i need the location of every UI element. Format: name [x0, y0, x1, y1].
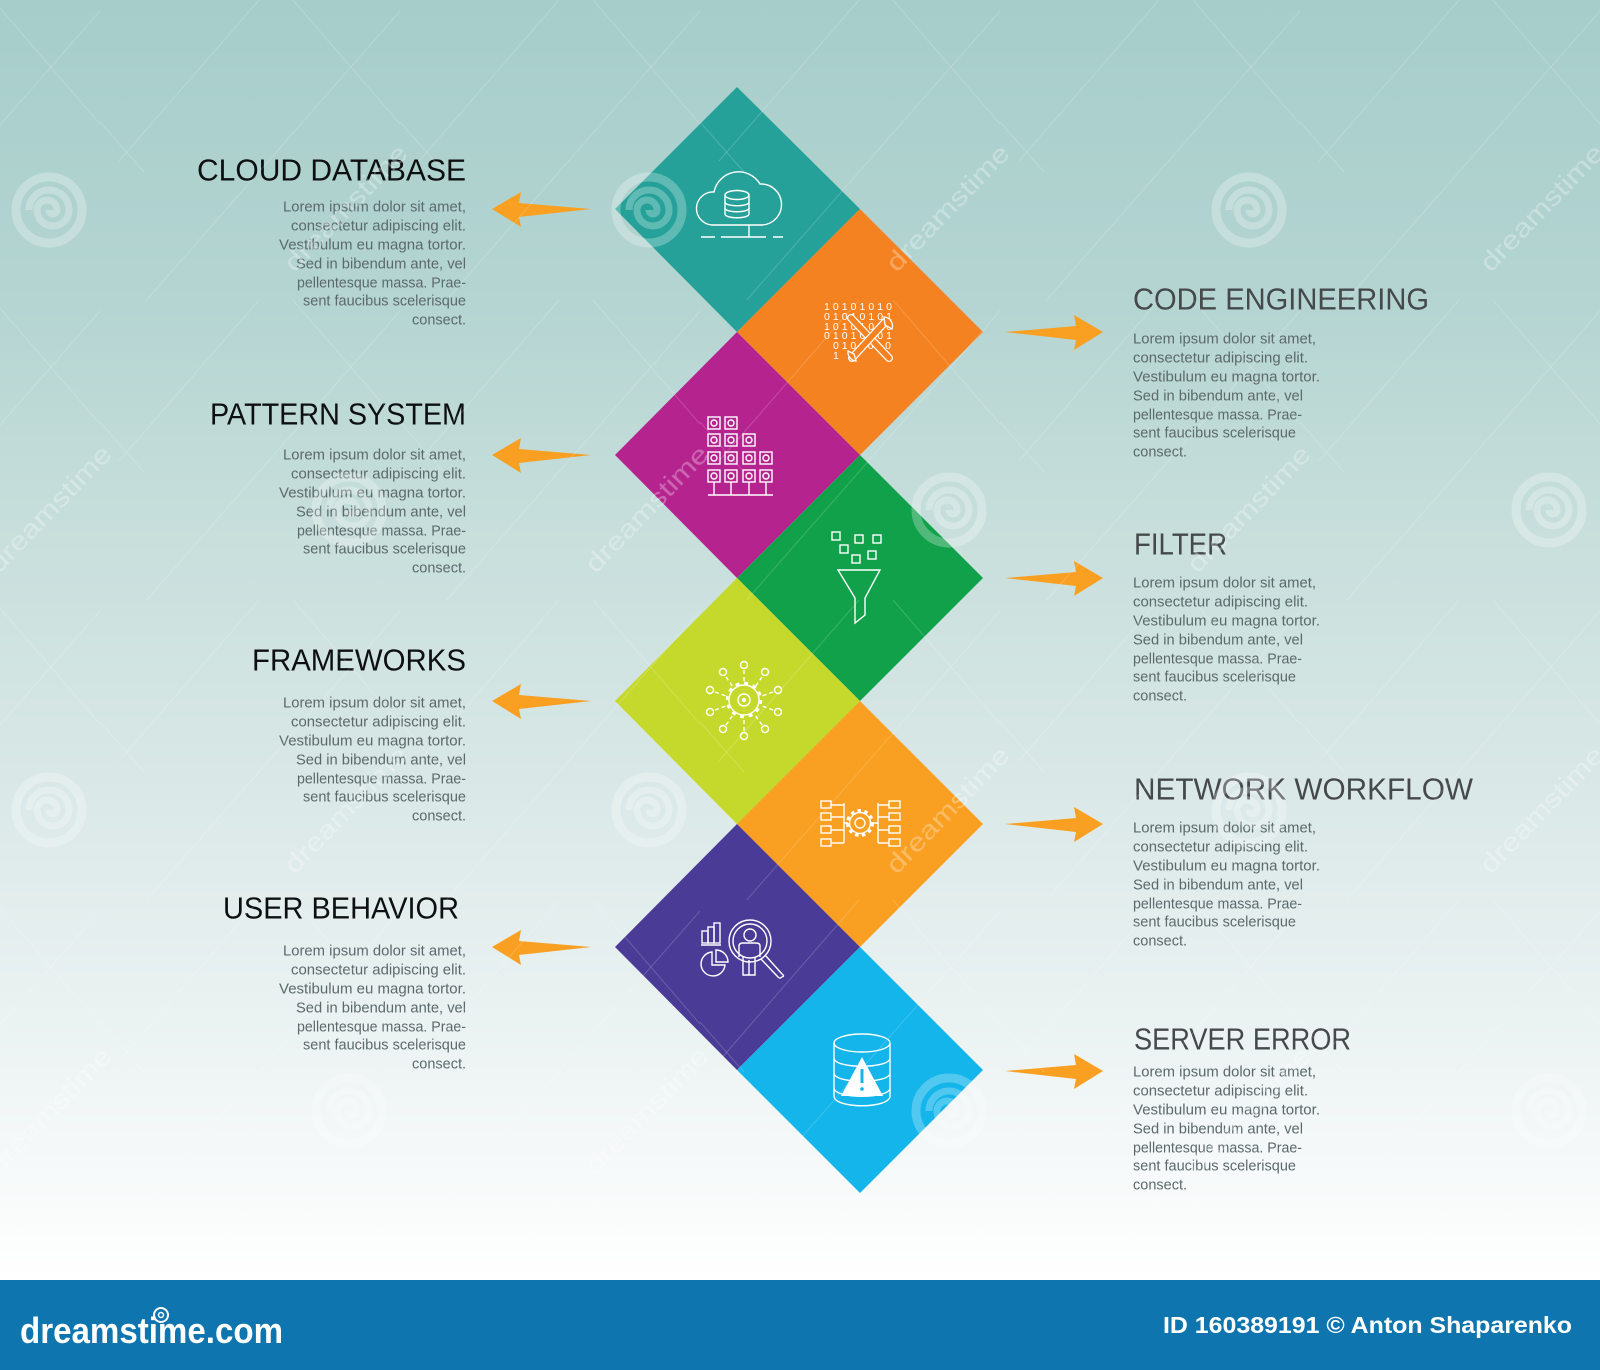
body: cloud database: consectetur adipiscing elit.: [291, 218, 466, 234]
body: pattern system: Lorem ipsum dolor sit amet,: [283, 448, 466, 464]
body: code engineering: consect.: [1133, 444, 1187, 460]
body: code engineering: Sed in bibendum ante, vel: [1133, 388, 1303, 404]
body: network workflow: consectetur adipiscing elit.: [1133, 840, 1308, 856]
arrow: server error: [1005, 1054, 1103, 1089]
body: cloud database: Lorem ipsum dolor sit amet,: [283, 200, 466, 216]
icon: server error: [834, 1034, 890, 1106]
icon: user behavior analytics: [701, 920, 784, 978]
icon: pattern grid: [708, 417, 773, 495]
watermark overlay: dreamstime: [578, 1041, 715, 1180]
heading: server error: SERVER ERROR: [1134, 1022, 1351, 1056]
icon: code and tools: 01010101: [824, 330, 892, 342]
body: user behavior: Vestibulum eu magna tortor.: [279, 982, 466, 998]
arrow: user behavior: [492, 930, 591, 965]
body: filter: [1133, 576, 1320, 704]
body: pattern system: Sed in bibendum ante, vel: [296, 504, 466, 520]
heading: pattern system: PATTERN SYSTEM: [210, 396, 466, 432]
icon: cloud database: [696, 172, 783, 237]
body: network workflow: sent faucibus scelerisque: [1133, 914, 1296, 930]
arrow: code engineering: [1005, 315, 1103, 350]
body: user behavior: consectetur adipiscing elit.: [291, 962, 466, 978]
arrow: filter: [1005, 561, 1103, 596]
body: user behavior: sent faucibus scelerisque: [303, 1038, 466, 1054]
body: user behavior: pellentesque massa. Prae-: [297, 1020, 466, 1036]
body: server error: pellentesque massa. Prae-: [1133, 1140, 1302, 1156]
body: pattern system: consect.: [412, 560, 466, 576]
text block: server error: [1133, 1022, 1351, 1194]
icon: code and tools: 10101010: [824, 321, 892, 333]
body: server error: consectetur adipiscing elit.: [1133, 1084, 1308, 1100]
text block: pattern system: [210, 396, 466, 576]
body: filter: Vestibulum eu magna tortor.: [1133, 614, 1320, 630]
footer bar: [0, 1280, 1600, 1370]
body: server error: [1133, 1064, 1320, 1194]
icon: framework gear network: [706, 662, 782, 740]
body: server error: Vestibulum eu magna tortor.: [1133, 1102, 1320, 1118]
text block: user behavior: [223, 890, 466, 1072]
arrow: pattern system: [492, 438, 591, 473]
diamond: server error: [737, 947, 983, 1193]
body: server error: consect.: [1133, 1178, 1187, 1194]
body: frameworks: Sed in bibendum ante, vel: [296, 752, 466, 768]
footer logo: dreamstime.com: [20, 1310, 283, 1351]
body: cloud database: sent faucibus scelerisque: [303, 294, 466, 310]
body: frameworks: pellentesque massa. Prae-: [297, 772, 466, 788]
icon: code and tools: 0101010: [833, 340, 891, 352]
arrow: cloud database: [492, 192, 591, 227]
body: code engineering: [1133, 332, 1320, 460]
body: user behavior: consect.: [412, 1056, 466, 1072]
watermark overlay: dreamstime: [277, 740, 414, 879]
watermark overlay: dreamstime: [1473, 138, 1600, 277]
body: frameworks: sent faucibus scelerisque: [303, 790, 466, 806]
body: frameworks: Vestibulum eu magna tortor.: [279, 734, 466, 750]
diamond: network workflow: [737, 701, 983, 947]
body: filter: sent faucibus scelerisque: [1133, 670, 1296, 686]
body: network workflow: [1133, 820, 1320, 950]
body: network workflow: Sed in bibendum ante, vel: [1133, 878, 1303, 894]
heading: filter: FILTER: [1134, 526, 1227, 562]
watermark overlay: dreamstime: [1473, 740, 1600, 879]
body: server error: Lorem ipsum dolor sit amet,: [1133, 1064, 1316, 1080]
body: pattern system: pellentesque massa. Prae-: [297, 524, 466, 540]
body: cloud database: consect.: [412, 312, 466, 328]
watermark overlay: dreamstime: [1180, 439, 1317, 578]
diamond stack: [615, 87, 983, 1193]
body: filter: consect.: [1133, 688, 1187, 704]
body: server error: sent faucibus scelerisque: [1133, 1158, 1296, 1174]
body: filter: Sed in bibendum ante, vel: [1133, 632, 1303, 648]
body: code engineering: Vestibulum eu magna tortor.: [1133, 370, 1320, 386]
body: frameworks: consect.: [412, 808, 466, 824]
body: pattern system: [279, 448, 466, 576]
body: pattern system: Vestibulum eu magna tortor.: [279, 486, 466, 502]
body: frameworks: [279, 696, 466, 824]
body: server error: Sed in bibendum ante, vel: [1133, 1122, 1303, 1138]
icon: code and tools: 10101010: [824, 301, 892, 313]
body: pattern system: consectetur adipiscing elit.: [291, 466, 466, 482]
body: user behavior: Lorem ipsum dolor sit amet,: [283, 944, 466, 960]
body: code engineering: pellentesque massa. Prae-: [1133, 408, 1302, 424]
body: cloud database: Vestibulum eu magna tortor.: [279, 238, 466, 254]
heading: user behavior: USER BEHAVIOR: [223, 890, 459, 926]
body: frameworks: consectetur adipiscing elit.: [291, 714, 466, 730]
footer credit: ID 160389191 © Anton Shaparenko: [1163, 1312, 1572, 1338]
body: code engineering: Lorem ipsum dolor sit amet,: [1133, 332, 1316, 348]
watermark overlay: dreamstime: [277, 138, 414, 277]
body: user behavior: Sed in bibendum ante, vel: [296, 1000, 466, 1016]
icon: filter funnel: [832, 532, 881, 623]
body: filter: consectetur adipiscing elit.: [1133, 594, 1308, 610]
heading: cloud database: CLOUD DATABASE: [197, 152, 466, 188]
watermark overlay: dreamstime: [1180, 1041, 1317, 1180]
icon: network workflow: [821, 801, 900, 846]
body: user behavior: [279, 944, 466, 1072]
icon: code and tools: 1: [833, 350, 839, 362]
watermark overlay: dreamstime: [578, 439, 715, 578]
diamond: user behavior: [615, 824, 860, 1070]
heading: code engineering: CODE ENGINEERING: [1133, 282, 1429, 316]
body: network workflow: pellentesque massa. Prae-: [1133, 896, 1302, 912]
body: cloud database: Sed in bibendum ante, vel: [296, 256, 466, 272]
diamond: code engineering: [737, 209, 983, 455]
body: code engineering: sent faucibus scelerisque: [1133, 426, 1296, 442]
diamond: filter: [737, 455, 983, 701]
icon: code and tools: [824, 301, 893, 362]
body: network workflow: Vestibulum eu magna tortor.: [1133, 858, 1320, 874]
arrow: network workflow: [1005, 807, 1103, 842]
text block: code engineering: [1133, 282, 1429, 460]
heading: frameworks: FRAMEWORKS: [252, 642, 466, 678]
body: code engineering: consectetur adipiscing elit.: [1133, 350, 1308, 366]
icon: code and tools: 01010101: [824, 311, 892, 323]
watermark overlay: dreamstime: [879, 138, 1016, 277]
diamond: pattern system: [615, 332, 860, 578]
body: cloud database: [279, 200, 466, 328]
text block: network workflow: [1133, 772, 1474, 950]
diamond: cloud database: [615, 87, 860, 332]
arrow: frameworks: [492, 684, 591, 719]
body: frameworks: Lorem ipsum dolor sit amet,: [283, 696, 466, 712]
body: cloud database: pellentesque massa. Prae-: [297, 276, 466, 292]
body: network workflow: Lorem ipsum dolor sit amet,: [1133, 820, 1316, 836]
body: pattern system: sent faucibus scelerisque: [303, 542, 466, 558]
body: network workflow: consect.: [1133, 934, 1187, 950]
diamond: frameworks: [615, 578, 860, 824]
body: filter: pellentesque massa. Prae-: [1133, 652, 1302, 668]
text block: frameworks: [252, 642, 466, 824]
text block: cloud database: [197, 152, 466, 328]
text block: filter: [1133, 526, 1320, 704]
body: filter: Lorem ipsum dolor sit amet,: [1133, 576, 1316, 592]
heading: network workflow: NETWORK WORKFLOW: [1134, 772, 1474, 806]
watermark overlay: dreamstime: [879, 740, 1016, 879]
